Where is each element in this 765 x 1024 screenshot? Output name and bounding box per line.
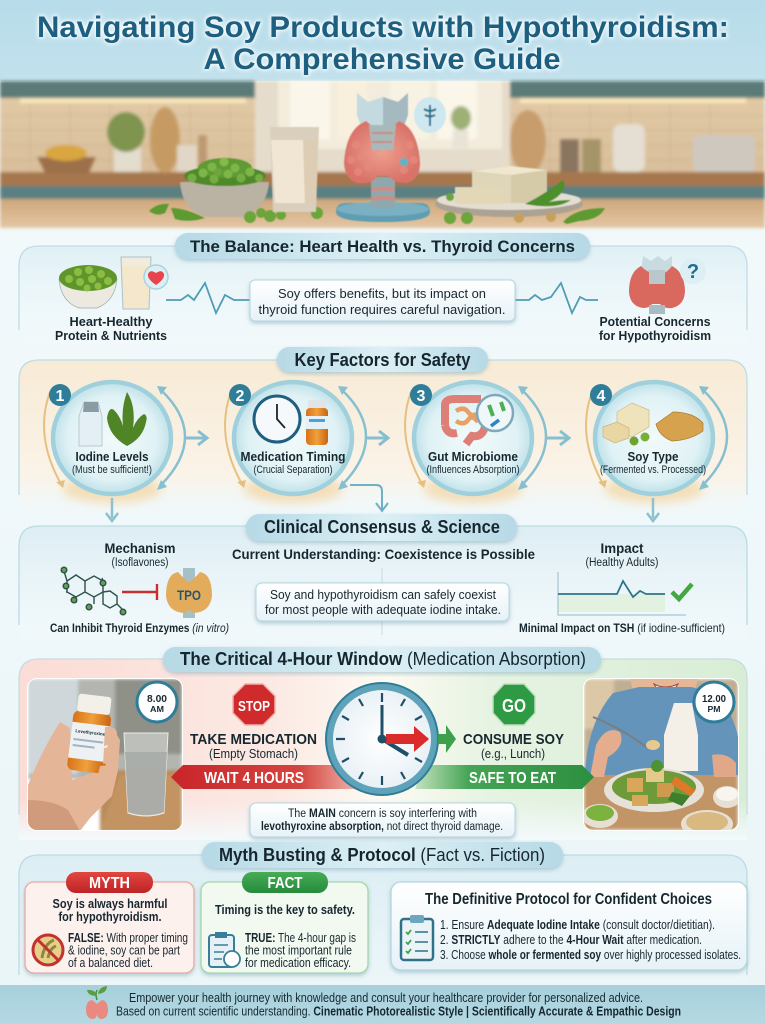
title: A Comprehensive Guide: [204, 43, 560, 76]
factor 3: gut microbiome: Gut Microbiome: [428, 449, 518, 464]
card: fact: Timing is the key to safety.: [215, 902, 355, 917]
mechanism column: (Isoflavones): [112, 557, 169, 569]
icon: intestine and magnifier: [445, 395, 513, 444]
card: myth: FALSE: With proper timing: [68, 931, 188, 945]
icon: tofu and tempeh: [603, 403, 703, 446]
card: fact: the most important rule: [245, 944, 352, 958]
heading: key factors: Key Factors for Safety: [294, 350, 470, 370]
stop sign: [233, 684, 275, 725]
label: heart-healthy: [55, 314, 167, 343]
take medication text: (Empty Stomach): [209, 747, 298, 761]
header band: [0, 0, 765, 81]
stop sign: STOP: [238, 698, 270, 715]
card: protocol: 1. Ensure Adequate Iodine Intake (consult doctor/dietitian).: [440, 918, 715, 932]
mechanism column: Can Inhibit Thyroid Enzymes (in vitro): [50, 621, 229, 635]
photo: taking medication: Levothyroxine: [75, 728, 106, 737]
title: Navigating Soy Products with Hypothyroidism:: [37, 11, 729, 44]
factor 2: medication timing: (Crucial Separation): [254, 464, 332, 476]
section: clinical consensus: [19, 514, 747, 640]
callout: main concern: The MAIN concern is soy interfering with: [288, 808, 477, 820]
inhibit symbol: [122, 584, 157, 600]
chart: TSH line: [558, 572, 686, 615]
title: Navigating Soy Products with Hypothyroidism:: [37, 11, 729, 44]
take medication text: [190, 731, 317, 761]
consume soy text: [463, 731, 564, 761]
factor 1: iodine levels: [44, 382, 185, 494]
impact column: [519, 540, 725, 635]
factor 4: soy type: (Fermented vs. Processed): [600, 464, 706, 476]
icon: checklist clipboard: [401, 915, 433, 960]
section: four hour window: [19, 647, 747, 840]
card: myth: [25, 872, 194, 973]
badge 2: 2: [236, 388, 245, 405]
factor 1: iodine levels: (Must be sufficient!): [72, 464, 152, 476]
arrow 3 to 4: [547, 431, 569, 445]
take medication text: TAKE MEDICATION: [190, 731, 317, 748]
hero photo: kitchen with soy foods and thyroid model: [0, 81, 765, 228]
icon: salt and seaweed: [79, 392, 147, 446]
tag: myth: [66, 872, 153, 893]
factor glow shadows: [62, 475, 704, 503]
heading: the balance: The Balance: Heart Health vs. Thyroid Concerns: [190, 237, 575, 256]
impact column: (Healthy Adults): [586, 557, 659, 569]
clock badge 12:00: [694, 682, 734, 722]
card: myth: for hypothyroidism.: [58, 909, 162, 924]
icon: thyroid with question: [629, 256, 706, 314]
tag: fact: [242, 872, 328, 893]
arrow 2 to 3: [366, 431, 388, 445]
glass of soy milk: [270, 127, 319, 212]
clock badge 8:00: 8.00: [147, 694, 167, 705]
arrow: wait 4 hours: [171, 765, 355, 789]
go sign: [493, 684, 535, 725]
card: fact: [201, 872, 368, 973]
card: protocol: 2. STRICTLY adhere to the 4-Hour Wait after medication.: [440, 933, 702, 947]
label: heart-healthy: Heart-Healthy: [70, 314, 153, 329]
arrow: safe to eat: SAFE TO EAT: [469, 770, 556, 787]
title: [37, 11, 729, 76]
callout: main concern: [250, 803, 515, 837]
card: myth: & iodine, soy can be part: [68, 944, 180, 958]
mechanism column: [50, 540, 229, 635]
arrow: wait 4 hours: WAIT 4 HOURS: [204, 770, 304, 787]
consume soy text: CONSUME SOY: [463, 731, 564, 748]
arrow: to mechanism: [106, 498, 118, 521]
icon: isoflavone molecule: [61, 567, 126, 615]
callout: balance text: thyroid function requires careful navigation.: [258, 302, 506, 317]
icon: thyroid with question: ?: [687, 261, 699, 283]
badge 4: [590, 384, 612, 406]
card: myth: of a balanced diet.: [68, 956, 153, 970]
panel: window background: [19, 659, 747, 840]
icon: TPO thyroid: [166, 568, 212, 618]
factor 3: gut microbiome: (Influences Absorption): [426, 464, 520, 476]
title: A Comprehensive Guide: [204, 43, 560, 76]
kitchen backdrop: [0, 81, 765, 228]
factor 4: soy type: Soy Type: [628, 449, 678, 464]
impact column: Impact: [600, 540, 644, 556]
badge 1: 1: [56, 388, 65, 405]
heading: clinical consensus: Clinical Consensus & Science: [264, 517, 500, 537]
card: protocol: [391, 882, 747, 970]
icon: check mark: [672, 584, 692, 599]
factor 2: medication timing: [225, 382, 366, 494]
central clock: [325, 682, 439, 796]
card: protocol: The Definitive Protocol for Confident Choices: [425, 891, 712, 908]
badge 4: 4: [597, 388, 606, 405]
heading: myth busting: Myth Busting & Protocol (Fact vs. Fiction): [219, 845, 545, 865]
heading: clinical consensus: [246, 514, 517, 541]
factor 3: gut microbiome: [405, 382, 546, 494]
red clock arrow: [386, 726, 429, 752]
ECG line right: [515, 283, 598, 313]
label: potential concerns: [599, 314, 711, 343]
impact column: Minimal Impact on TSH (if iodine-sufficient): [519, 621, 725, 635]
clock badge 12:00: 12.00: [702, 694, 726, 705]
clock badge 8:00: AM: [150, 705, 164, 714]
label: potential concerns: Potential Concerns: [600, 314, 710, 329]
bowl of edamame: [149, 158, 323, 223]
card: fact: for medication efficacy.: [245, 956, 351, 970]
heading: four hour window: The Critical 4-Hour Window (Medication Absorption): [180, 649, 586, 669]
tag: fact: FACT: [268, 875, 303, 892]
footer band: Based on current scientific understanding. Cinematic Photorealistic Style | Scientifically Accurate & Empathic Design: [116, 1004, 681, 1018]
green arrow: [438, 725, 456, 753]
consume soy text: (e.g., Lunch): [481, 747, 545, 761]
icon: no soy: [33, 935, 63, 965]
label: heart-healthy: Protein & Nutrients: [55, 328, 167, 343]
badge 3: 3: [417, 388, 426, 405]
callout: balance text: Soy offers benefits, but its impact on: [278, 286, 486, 301]
section: key factors: [19, 347, 747, 521]
section: the balance: [19, 233, 747, 345]
arrow 1 to 2: [185, 431, 207, 445]
badge 1: [49, 384, 71, 406]
callout: coexistence: for most people with adequate iodine intake.: [265, 602, 501, 617]
tag: myth: MYTH: [89, 875, 130, 892]
clock badge 8:00: [137, 682, 177, 722]
card: myth: Soy is always harmful: [52, 896, 168, 911]
plate of tofu: [435, 166, 605, 224]
panel: clinical background: [19, 526, 747, 640]
callout: main concern: levothyroxine absorption, not direct thyroid damage.: [261, 821, 503, 833]
badge 3: [410, 384, 432, 406]
badge 2: [229, 384, 251, 406]
icon: thyroid sprout: [86, 986, 108, 1019]
photo: taking medication: [27, 678, 183, 832]
label: potential concerns: for Hypothyroidism: [599, 328, 711, 343]
mechanism column: Mechanism: [104, 540, 176, 556]
card: fact: TRUE: The 4-hour gap is: [245, 931, 356, 945]
clock badge 12:00: PM: [708, 705, 721, 714]
heading: the balance: [175, 233, 590, 259]
icon: clipboard and clock: [209, 932, 240, 967]
arrow: safe to eat: [415, 765, 594, 789]
arrow: to current understanding: [350, 485, 388, 511]
factor 4: soy type: [586, 382, 727, 494]
icon: TPO thyroid: TPO: [177, 587, 201, 603]
current understanding heading: Current Understanding: Coexistence is Possible: [232, 546, 535, 562]
panel: myth busting background: [19, 855, 747, 985]
section: myth busting and protocol: [19, 842, 747, 985]
callout: coexistence: Soy and hypothyroidism can safely coexist: [270, 587, 496, 602]
callout: balance text: [250, 280, 515, 321]
go sign: GO: [502, 696, 526, 716]
icon: edamame bowl and milk with heart: [59, 257, 168, 309]
panel: key factors background: [19, 360, 747, 515]
ECG line left: [166, 283, 250, 313]
photo: eating soy lunch: [582, 678, 741, 838]
arrow: to impact: [647, 498, 659, 521]
factor 2: medication timing: Medication Timing: [240, 449, 346, 464]
callout: coexistence: [256, 568, 509, 635]
footer band: [0, 985, 765, 1024]
icon: clock and pill bottle: [254, 396, 328, 445]
footer band: Empower your health journey with knowledge and consult your healthcare provider for personalized advice.: [129, 990, 643, 1005]
panel: balance background: [19, 246, 747, 345]
factor 1: iodine levels: Iodine Levels: [76, 449, 148, 464]
thyroid model on stand: [336, 93, 446, 222]
